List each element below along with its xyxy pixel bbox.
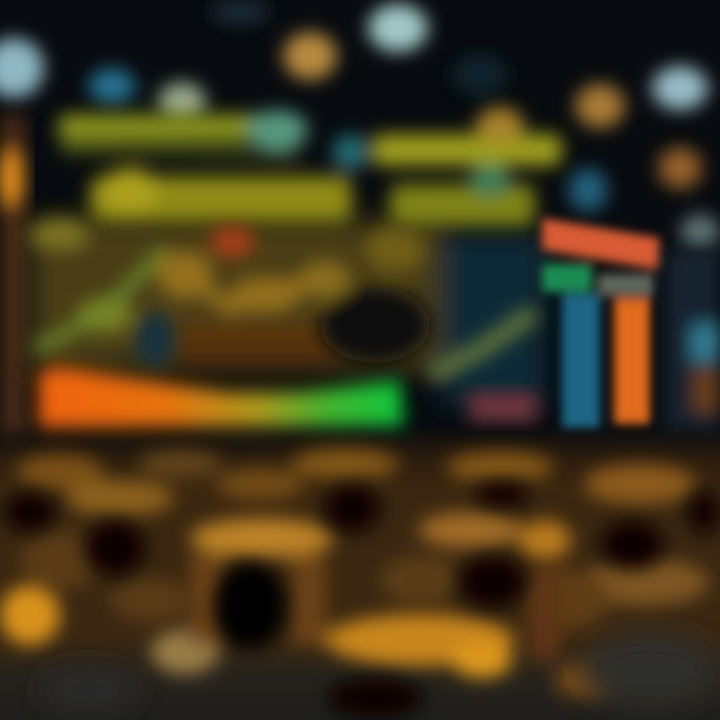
small pink-red label [468, 392, 538, 422]
line chart: mottled olive and orange trace [30, 219, 430, 368]
ceiling lights [0, 0, 720, 250]
seat hollows: dark openings [4, 481, 720, 718]
chart headings: yellow-green bands [58, 107, 562, 226]
front seats: bright orange backs [0, 518, 615, 698]
back seat rows [16, 448, 709, 630]
blue column [562, 294, 600, 428]
rising green trend line [430, 312, 535, 375]
red banner [542, 218, 660, 270]
pale cap [598, 274, 654, 296]
gradient bar [38, 366, 404, 428]
right bar chart [542, 218, 660, 428]
chart panel backdrop [30, 220, 545, 405]
left column [0, 115, 26, 435]
orange column [614, 298, 650, 424]
bottom right floor [40, 634, 720, 712]
green tab [542, 264, 592, 292]
right edge panel [665, 250, 720, 430]
auditorium floor [0, 425, 720, 720]
